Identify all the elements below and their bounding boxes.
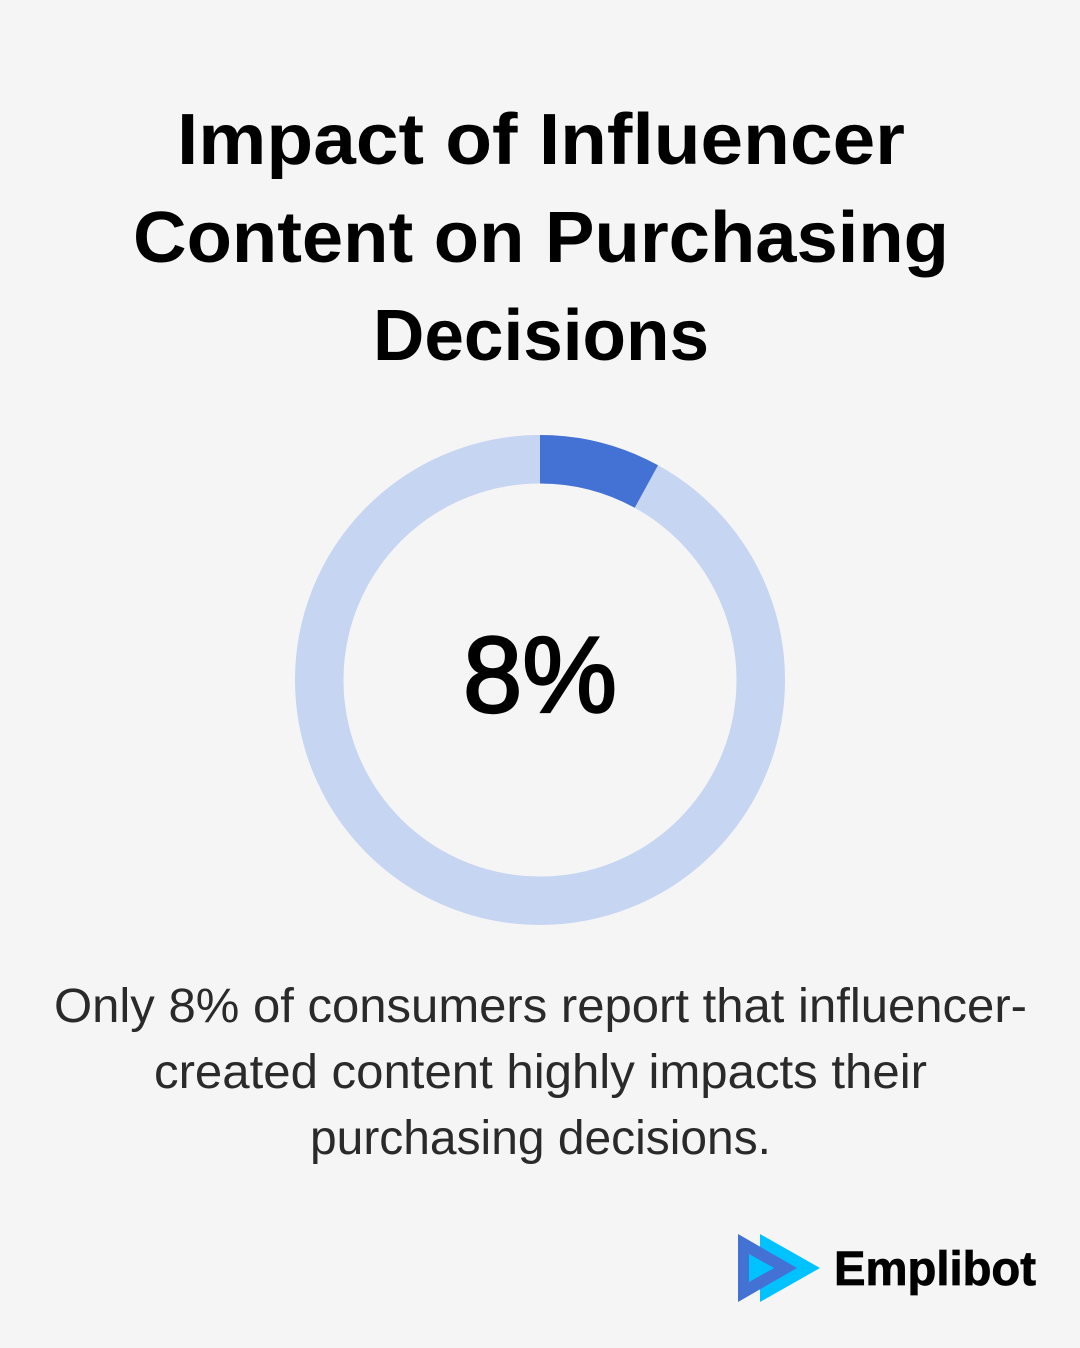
description text: created content highly impacts their xyxy=(154,1046,927,1099)
donut track xyxy=(319,459,761,901)
donut highlighted segment xyxy=(540,435,658,508)
description text xyxy=(54,980,1027,1165)
logo wordmark: Emplibot xyxy=(834,1243,1036,1296)
description text: Only 8% of consumers report that influencer- xyxy=(54,980,1027,1033)
title xyxy=(133,100,949,376)
logo: Emplibot xyxy=(738,1234,1036,1302)
title: Impact of Influencer xyxy=(177,100,905,180)
icon: play triangles xyxy=(738,1234,820,1302)
donut chart: 8% xyxy=(319,435,761,901)
donut centre value: 8% xyxy=(463,614,617,735)
title: Decisions xyxy=(373,296,709,376)
title: Content on Purchasing xyxy=(133,198,949,278)
description text: purchasing decisions. xyxy=(310,1112,771,1165)
